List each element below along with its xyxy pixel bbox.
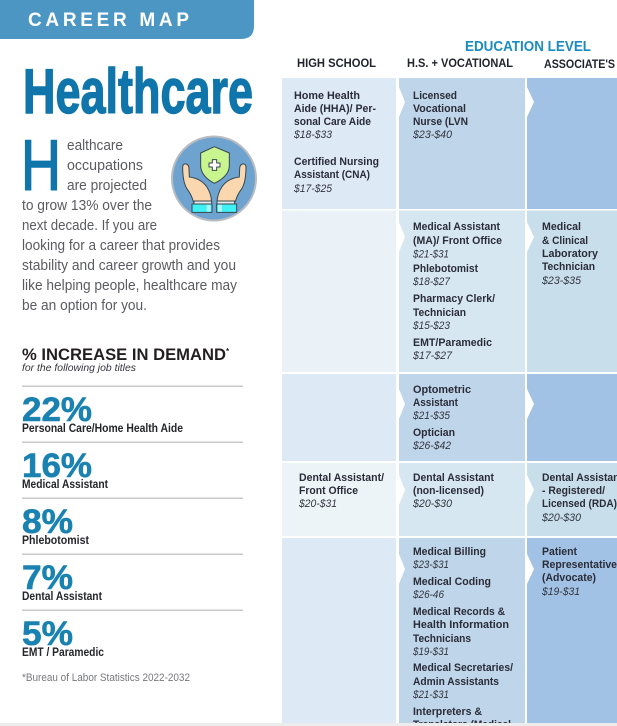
title: Healthcare: [23, 57, 253, 127]
stat list: [22, 386, 243, 659]
arrow: [399, 222, 405, 252]
intro text block: occupations: [67, 158, 143, 174]
heading: percent increase in demand: *: [226, 347, 230, 356]
panel: row 3 vision: [282, 374, 617, 461]
stat: 22%: 22%: [22, 391, 92, 429]
banner: career map: [0, 0, 254, 39]
jobs: high school: Assistant (CNA): [294, 169, 370, 181]
jobs: vocational: $20-$30: [412, 498, 453, 510]
jobs: vocational: Licensed: [413, 90, 457, 102]
jobs: vocational: $26-46: [412, 589, 445, 601]
jobs: associate's: Technician: [542, 261, 595, 273]
panel: row 1 patient care: [282, 78, 617, 209]
jobs: associate's: Patient: [542, 546, 577, 558]
jobs: vocational: $21-$35: [412, 410, 451, 422]
arrow: [399, 475, 405, 505]
column headers: [297, 56, 615, 71]
jobs: vocational: Optician: [413, 427, 455, 439]
jobs: vocational: $23-$31: [412, 559, 449, 571]
arrow: [399, 389, 405, 419]
jobs: high school: Home Health: [294, 90, 360, 102]
jobs: vocational: [412, 90, 468, 141]
jobs: vocational: Nurse (LVN: [413, 116, 468, 128]
intro text block: are projected: [67, 178, 147, 194]
jobs: associate's: Medical: [542, 221, 581, 233]
jobs: high school: Certified Nursing: [294, 156, 379, 168]
jobs: vocational: Phlebotomist: [413, 263, 478, 275]
jobs: associate's: $23-$35: [541, 275, 582, 287]
jobs: associate's: $20-$30: [541, 512, 582, 524]
jobs: high school: [293, 90, 379, 195]
intro text block: like helping people, healthcare may: [22, 278, 238, 294]
intro text block: looking for a career that provides: [22, 238, 220, 254]
arrow: [527, 87, 534, 117]
stat: 5%: 5%: [22, 615, 73, 653]
page bottom edge: [0, 723, 617, 726]
jobs: vocational: Medical Coding: [413, 576, 491, 588]
stat: 8%: 8%: [22, 503, 73, 541]
jobs: vocational: Dental Assistant: [413, 472, 494, 484]
jobs: vocational: (non-licensed): [413, 485, 484, 497]
heading: percent increase in demand: % INCREASE IN DEMAND: [22, 345, 226, 364]
jobs: vocational: EMT/Paramedic: [413, 337, 492, 349]
jobs: high school: $20-$31: [298, 498, 337, 510]
stat: 7%: [22, 559, 102, 603]
jobs: vocational: Technician: [413, 307, 466, 319]
stat: 7%: 7%: [22, 559, 73, 597]
arrow: [527, 475, 534, 505]
stat: 16%: [22, 447, 108, 491]
jobs: vocational: Interpreters &: [413, 706, 482, 718]
heading: percent increase in demand: for the following job titles: [22, 362, 137, 374]
footnote: *Bureau of Labor Statistics 2022-2032: [22, 672, 190, 684]
jobs: vocational: (MA)/ Front Office: [413, 235, 502, 247]
jobs: vocational: Pharmacy Clerk/: [413, 293, 495, 305]
heading: education level: EDUCATION LEVEL: [465, 39, 591, 55]
column headers: HIGH SCHOOL: [297, 56, 376, 70]
jobs: vocational: [412, 546, 513, 726]
jobs: vocational: $15-$23: [412, 320, 451, 332]
intro text block: H: [21, 127, 61, 206]
jobs: high school: sonal Care Aide: [294, 116, 371, 128]
stat: 22%: Personal Care/Home Health Aide: [22, 423, 183, 435]
jobs: vocational: Medical Assistant: [413, 221, 500, 233]
panel: row 4 dental: [282, 463, 617, 536]
intro text block: to grow 13% over the: [22, 198, 152, 214]
panel: row 5 administrative: [282, 538, 617, 726]
jobs: associate's: [541, 472, 617, 524]
stat: 5%: EMT / Paramedic: [22, 647, 105, 659]
jobs: vocational: Medical Billing: [413, 546, 486, 558]
jobs: high school: Dental Assistant/: [299, 472, 384, 484]
jobs: vocational: $23-$40: [412, 129, 453, 141]
intro text block: next decade. If you are: [22, 218, 157, 234]
stat: 16%: 16%: [22, 447, 92, 485]
intro text block: stability and career growth and you: [22, 258, 236, 274]
jobs: vocational: $21-$31: [412, 248, 449, 260]
arrow: [527, 222, 534, 252]
jobs: high school: Front Office: [299, 485, 358, 497]
jobs: vocational: [412, 221, 502, 362]
jobs: associate's: (Advocate): [542, 572, 596, 584]
column headers: H.S. + VOCATIONAL: [407, 56, 513, 70]
jobs: associate's: Laboratory: [542, 248, 599, 260]
intro text block: ealthcare: [67, 138, 123, 154]
jobs: associate's: - Registered/: [542, 485, 605, 497]
jobs: vocational: [412, 384, 471, 452]
jobs: vocational: Admin Assistants: [413, 676, 499, 688]
arrow: [527, 389, 534, 419]
jobs: vocational: Health Information: [413, 619, 509, 631]
jobs: associate's: [541, 221, 599, 287]
icon: hands holding medical shield: [172, 136, 256, 220]
jobs: vocational: $17-$27: [412, 350, 453, 362]
stat: 16%: Medical Assistant: [22, 479, 108, 491]
intro text block: [21, 127, 238, 314]
jobs: vocational: Medical Records &: [413, 606, 505, 618]
arrow: [527, 554, 534, 584]
arrow: [399, 87, 405, 117]
stat: 22%: [22, 391, 183, 435]
jobs: vocational: Vocational: [413, 103, 466, 115]
heading: percent increase in demand: [22, 345, 230, 374]
stat: 5%: [22, 615, 105, 659]
jobs: high school: $18-$33: [293, 129, 333, 141]
jobs: vocational: $19-$31: [412, 646, 449, 658]
jobs: vocational: $21-$31: [412, 689, 449, 701]
panel: row 2 clinical: [282, 210, 617, 372]
jobs: vocational: $18-$27: [412, 276, 451, 288]
jobs: high school: $17-$25: [293, 183, 333, 195]
jobs: vocational: $26-$42: [412, 440, 451, 452]
jobs: vocational: Assistant: [413, 397, 458, 409]
jobs: vocational: Technicians: [413, 633, 471, 645]
banner: career map: CAREER MAP: [28, 10, 189, 31]
jobs: vocational: Optometric: [413, 384, 471, 396]
jobs: vocational: Medical Secretaries/: [413, 662, 513, 674]
arrow: [399, 554, 405, 584]
jobs: vocational: [412, 472, 494, 510]
jobs: high school: [298, 472, 384, 510]
stat: 8%: Phlebotomist: [22, 535, 89, 547]
jobs: associate's: $19-$31: [541, 586, 580, 598]
jobs: high school: Aide (HHA)/ Per-: [294, 103, 376, 115]
stat: 8%: [22, 503, 89, 547]
jobs: associate's: & Clinical: [542, 235, 588, 247]
stat: 7%: Dental Assistant: [22, 591, 102, 603]
intro text block: be an option for you.: [22, 298, 147, 314]
jobs: associate's: [541, 546, 617, 598]
